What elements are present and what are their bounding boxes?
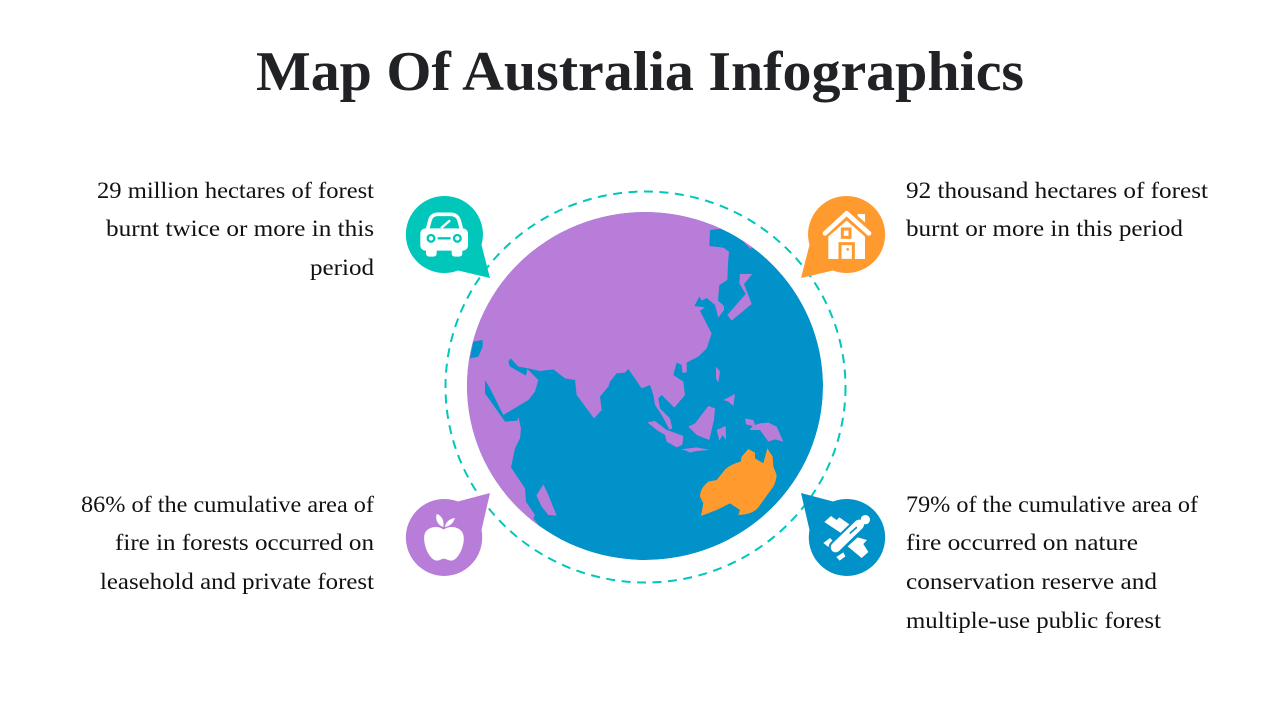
pin shape purple xyxy=(406,493,490,576)
icon: plane xyxy=(823,515,870,561)
island: Madagascar xyxy=(536,484,557,516)
island: northern sliver xyxy=(741,240,752,249)
text block: top left xyxy=(97,178,374,281)
pin: house xyxy=(801,196,885,278)
island: Japan xyxy=(727,274,752,321)
pin shape teal xyxy=(406,196,490,278)
island: Philippines xyxy=(723,394,735,406)
globe map xyxy=(467,212,823,560)
island: Sulawesi xyxy=(717,426,726,441)
Australia highlight xyxy=(700,448,777,516)
text block: bottom left: 86% of the cumulative area of xyxy=(81,492,374,518)
pin: apple xyxy=(406,493,490,576)
text block: top left: burnt twice or more in this xyxy=(106,216,374,242)
dashed ring around globe xyxy=(446,192,846,582)
text block: bottom right: conservation reserve and xyxy=(906,569,1157,595)
text block: bottom left: fire in forests occurred on xyxy=(115,530,374,556)
continents and islands xyxy=(467,212,784,526)
text block: bottom left xyxy=(81,492,374,595)
island: Borneo xyxy=(688,406,715,440)
island: Sumatra xyxy=(647,421,683,447)
island: Java xyxy=(681,447,710,453)
land: Eurasia and Africa xyxy=(467,212,729,526)
ocean xyxy=(467,212,823,560)
pin shape blue xyxy=(801,493,885,576)
text block: bottom left: leasehold and private forest xyxy=(100,569,374,595)
title: Map Of Australia Infographics xyxy=(256,41,1024,103)
text block: bottom right: multiple-use public forest xyxy=(906,608,1161,634)
text block: top left: 29 million hectares of forest xyxy=(97,178,374,204)
text block: bottom right: 79% of the cumulative area of xyxy=(906,492,1198,518)
pin: car xyxy=(406,196,490,278)
sea patch: Mediterranean xyxy=(470,340,483,358)
icon: house xyxy=(825,213,869,260)
island: Taiwan xyxy=(716,367,720,383)
icon: car xyxy=(420,214,468,257)
text block: bottom right xyxy=(906,492,1198,634)
text block: top right: 92 thousand hectares of forest xyxy=(906,178,1208,204)
island: New Guinea xyxy=(745,418,783,442)
text block: bottom right: fire occurred on nature xyxy=(906,530,1138,556)
pin: plane xyxy=(801,493,885,576)
icon: apple xyxy=(424,514,464,561)
text block: top right: burnt or more in this period xyxy=(906,216,1183,242)
pin shape orange xyxy=(801,196,885,278)
text block: top left: period xyxy=(310,255,374,281)
text block: top right xyxy=(906,178,1208,242)
